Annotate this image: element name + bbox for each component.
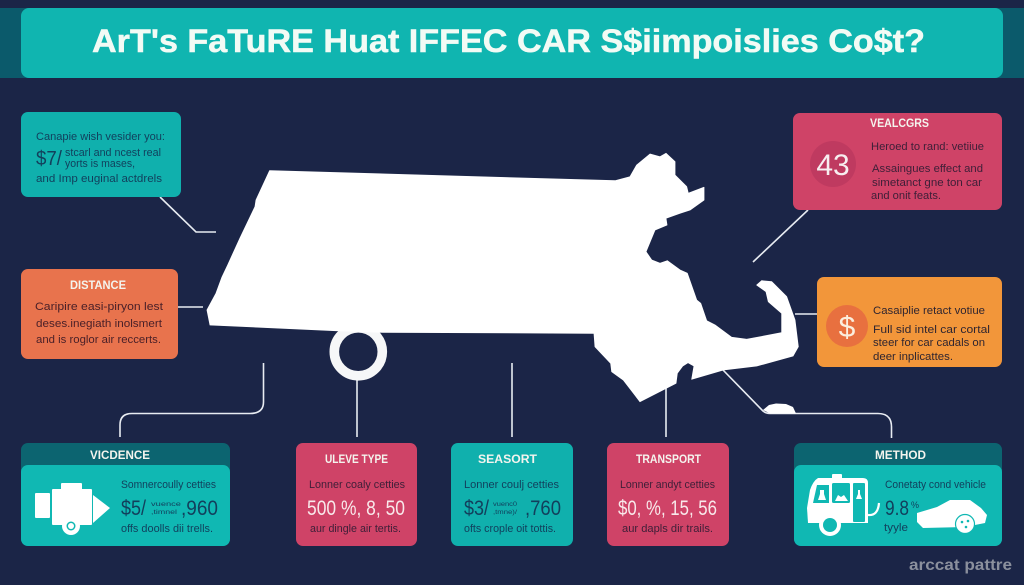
panel: vealcgrs [793, 113, 1002, 210]
panel: method: Conetaty cond vehicle [885, 479, 986, 491]
icon: number badge 43 [810, 141, 856, 187]
panel: vicdence: ,timnel [151, 510, 177, 516]
panel: seasort: SEASORT [478, 454, 537, 466]
panel: transport: Lonner andyt cetties [620, 479, 715, 491]
connector lines [120, 197, 892, 438]
panel: seasort [451, 443, 573, 546]
panel: orange value callout [817, 277, 1002, 367]
icon: truck [35, 483, 110, 535]
panel: vealcgrs: VEALCGRS [870, 118, 929, 130]
panel: orange value callout: Full sid intel car cortal [873, 324, 990, 336]
panel: method: % [911, 500, 919, 510]
panel: vicdence: Somnercoully cetties [121, 479, 216, 491]
panel: seasort: ,tmne)/ [493, 510, 517, 516]
ring marker [334, 328, 382, 376]
panel: distance: DISTANCE [70, 280, 126, 292]
icon: dollar badge: $ [839, 311, 856, 344]
panel: distance [21, 269, 178, 359]
title banner [0, 8, 1024, 78]
panel: vicdence: VICDENCE [90, 450, 150, 462]
panel: top left callout: yorts is mases, [65, 158, 135, 170]
icon: number badge 43: 43 [816, 149, 850, 182]
panel: vehicle type: aur dingle air tertis. [310, 523, 401, 535]
panel: top left callout [21, 112, 181, 197]
panel: seasort: $3/ [464, 497, 489, 520]
panel: top left callout: $7/ [36, 148, 62, 170]
panel: method [794, 443, 1002, 546]
panel: vealcgrs: simetanct gne ton car [872, 177, 982, 189]
panel: vehicle type [296, 443, 417, 546]
panel: vicdence: $5/ [121, 497, 146, 520]
panel: top left callout: and Imp euginal actdrels [36, 173, 163, 185]
panel: orange value callout: steer for car cadals on [873, 337, 985, 349]
panel: distance: Caripire easi-piryon lest [35, 301, 163, 313]
panel: orange value callout: Casaiplie retact votiue [873, 305, 985, 317]
icon: car [917, 500, 987, 534]
panel: top left callout: Canapie wish vesider you: [36, 131, 165, 143]
panel: distance: deses.inegiath inolsmert [36, 318, 162, 330]
panel: method: 9.8 [885, 497, 909, 520]
panel: seasort: ofts crople oit tottis. [464, 523, 556, 535]
title banner: ArT's FaTuRE Huat IFFEC CAR S$iimpoislies Co$t? [92, 23, 925, 59]
panel: vehicle type: ULEVE TYPE [325, 454, 388, 466]
panel: transport: aur dapls dir trails. [622, 523, 713, 535]
panel: vicdence [21, 443, 230, 546]
panel: transport [607, 443, 729, 546]
panel: vicdence: offs doolls dii trells. [121, 523, 213, 535]
panel: vehicle type: 500 %, 8, 50 [307, 497, 405, 520]
panel: orange value callout: deer inplicattes. [873, 351, 953, 363]
panel: method: METHOD [875, 450, 926, 462]
panel: vicdence: vuence [151, 502, 182, 508]
panel: vehicle type: Lonner coaly cetties [309, 479, 405, 491]
map of Massachusetts [207, 153, 798, 414]
panel: seasort: vuenc0 [493, 502, 518, 508]
panel: transport: TRANSPORT [636, 454, 701, 466]
watermark: arccat pattre [909, 557, 1012, 574]
panel: distance: and is roglor air reccerts. [36, 334, 161, 346]
panel: transport: $0, %, 15, 56 [618, 497, 717, 520]
panel: vealcgrs: Heroed to rand: vetiiue [871, 141, 984, 153]
panel: method: tyyle [884, 522, 908, 534]
panel: vealcgrs: Assaingues effect and [872, 163, 983, 175]
panel: seasort: ,760 [525, 497, 561, 520]
panel: vealcgrs: and onit feats. [871, 190, 941, 202]
panel: vicdence: ,960 [181, 497, 218, 520]
icon: dollar badge [826, 305, 868, 347]
panel: seasort: Lonner coulj cetties [464, 479, 559, 491]
panel: top left callout: stcarl and ncest real [65, 147, 161, 159]
icon: van [807, 474, 879, 536]
